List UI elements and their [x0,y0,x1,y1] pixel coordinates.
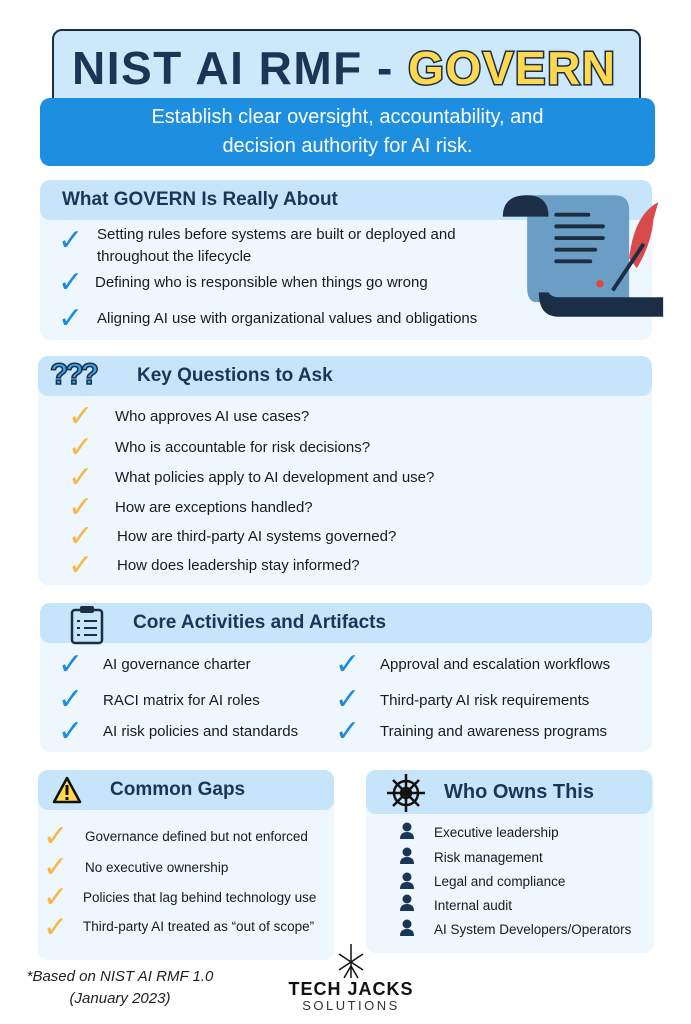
panel: who owns this: Legal and compliance [434,874,565,889]
panel: core activities: ✓ [335,647,360,682]
panel: key questions: How are exceptions handled? [115,499,313,516]
panel: common gaps: ✓ [43,880,68,915]
panel: core activities: ✓ [58,682,83,717]
panel: core activities: Third-party AI risk requirements [380,692,589,709]
panel: core activities: Approval and escalation workflows [380,656,610,673]
items: ✓ [58,223,83,258]
panel: key questions: ✓ [68,460,93,495]
panel: core activities: ✓ [58,714,83,749]
panel: common gaps [38,770,334,960]
panel: key questions: ✓ [68,490,93,525]
panel: common gaps: Third-party AI treated as “out of scope” [83,919,314,934]
panel: who owns this: Executive leadership [434,825,559,840]
items: ✓ [68,399,93,434]
icon: question marks: ??? [50,358,96,391]
title box [52,29,641,119]
icon: scroll and quill [502,195,664,317]
panel: who owns this: AI System Developers/Operators [434,922,631,937]
icon: warning [52,776,82,804]
panel: common gaps: Governance defined but not enforced [85,829,308,844]
panel: what govern is about: Setting rules before systems are built or deployed and [97,226,456,243]
panel: what govern is about: Defining who is responsible when things go wrong [95,274,428,291]
panel: what govern is about: ✓ [58,265,83,300]
icon: clipboard [70,606,104,644]
panel: key questions: ✓ [68,548,93,583]
panel: common gaps: Policies that lag behind technology use [83,890,316,905]
panel: core activities: RACI matrix for AI roles [103,692,260,709]
panel: common gaps: Common Gaps [110,779,245,800]
footnote [27,968,214,1007]
panel: common gaps: ✓ [43,850,68,885]
panel: who owns this [366,770,654,953]
subtitle banner [40,98,655,166]
items: ✓ [58,647,83,682]
panel: who owns this: Who Owns This [444,781,594,803]
header [38,770,334,810]
panel: common gaps: No executive ownership [85,860,228,875]
items: ✓ [43,819,68,854]
title text: NIST AI RMF - GOVERN [72,42,617,94]
panel: what govern is about: What GOVERN Is Really About [62,189,338,210]
logo: SOLUTIONS [302,998,400,1013]
icon: ship wheel [387,774,425,812]
subtitle banner: decision authority for AI risk. [222,135,473,157]
footnote: *Based on NIST AI RMF 1.0 [27,968,213,985]
panel: common gaps: ✓ [43,910,68,945]
header [40,180,652,220]
panel: key questions: ✓ [68,430,93,465]
panel: core activities: Core Activities and Artifacts [133,612,386,633]
panel: what govern is about: ✓ [58,301,83,336]
panel: core activities: ✓ [335,714,360,749]
panel: key questions: How are third-party AI systems governed? [117,528,396,545]
panel: key questions: Who is accountable for risk decisions? [115,439,370,456]
panel: core activities: AI governance charter [103,656,251,673]
items [400,822,414,936]
panel: core activities: Training and awareness programs [380,723,607,740]
subtitle banner: Establish clear oversight, accountability, and [151,106,544,128]
panel: who owns this: Risk management [434,850,543,865]
panel: what govern is about: Aligning AI use with organizational values and obligations [97,310,477,327]
footnote: (January 2023) [70,990,170,1007]
panel: core activities [40,603,652,752]
panel: key questions: What policies apply to AI development and use? [115,469,434,486]
panel: what govern is about: throughout the lifecycle [97,248,251,265]
panel: key questions: Key Questions to Ask [137,365,333,386]
panel: core activities: AI risk policies and standards [103,723,298,740]
panel: who owns this: Internal audit [434,898,512,913]
header [38,356,652,396]
panel: key questions: Who approves AI use cases? [115,408,309,425]
panel: key questions [38,356,652,585]
header [366,770,652,814]
header [40,603,652,643]
panel: key questions: ✓ [68,519,93,554]
panel: core activities: ✓ [335,682,360,717]
logo [288,944,414,1013]
panel: key questions: How does leadership stay informed? [117,557,360,574]
panel: what govern is about [40,180,652,340]
logo: TECH JACKS [288,979,414,999]
